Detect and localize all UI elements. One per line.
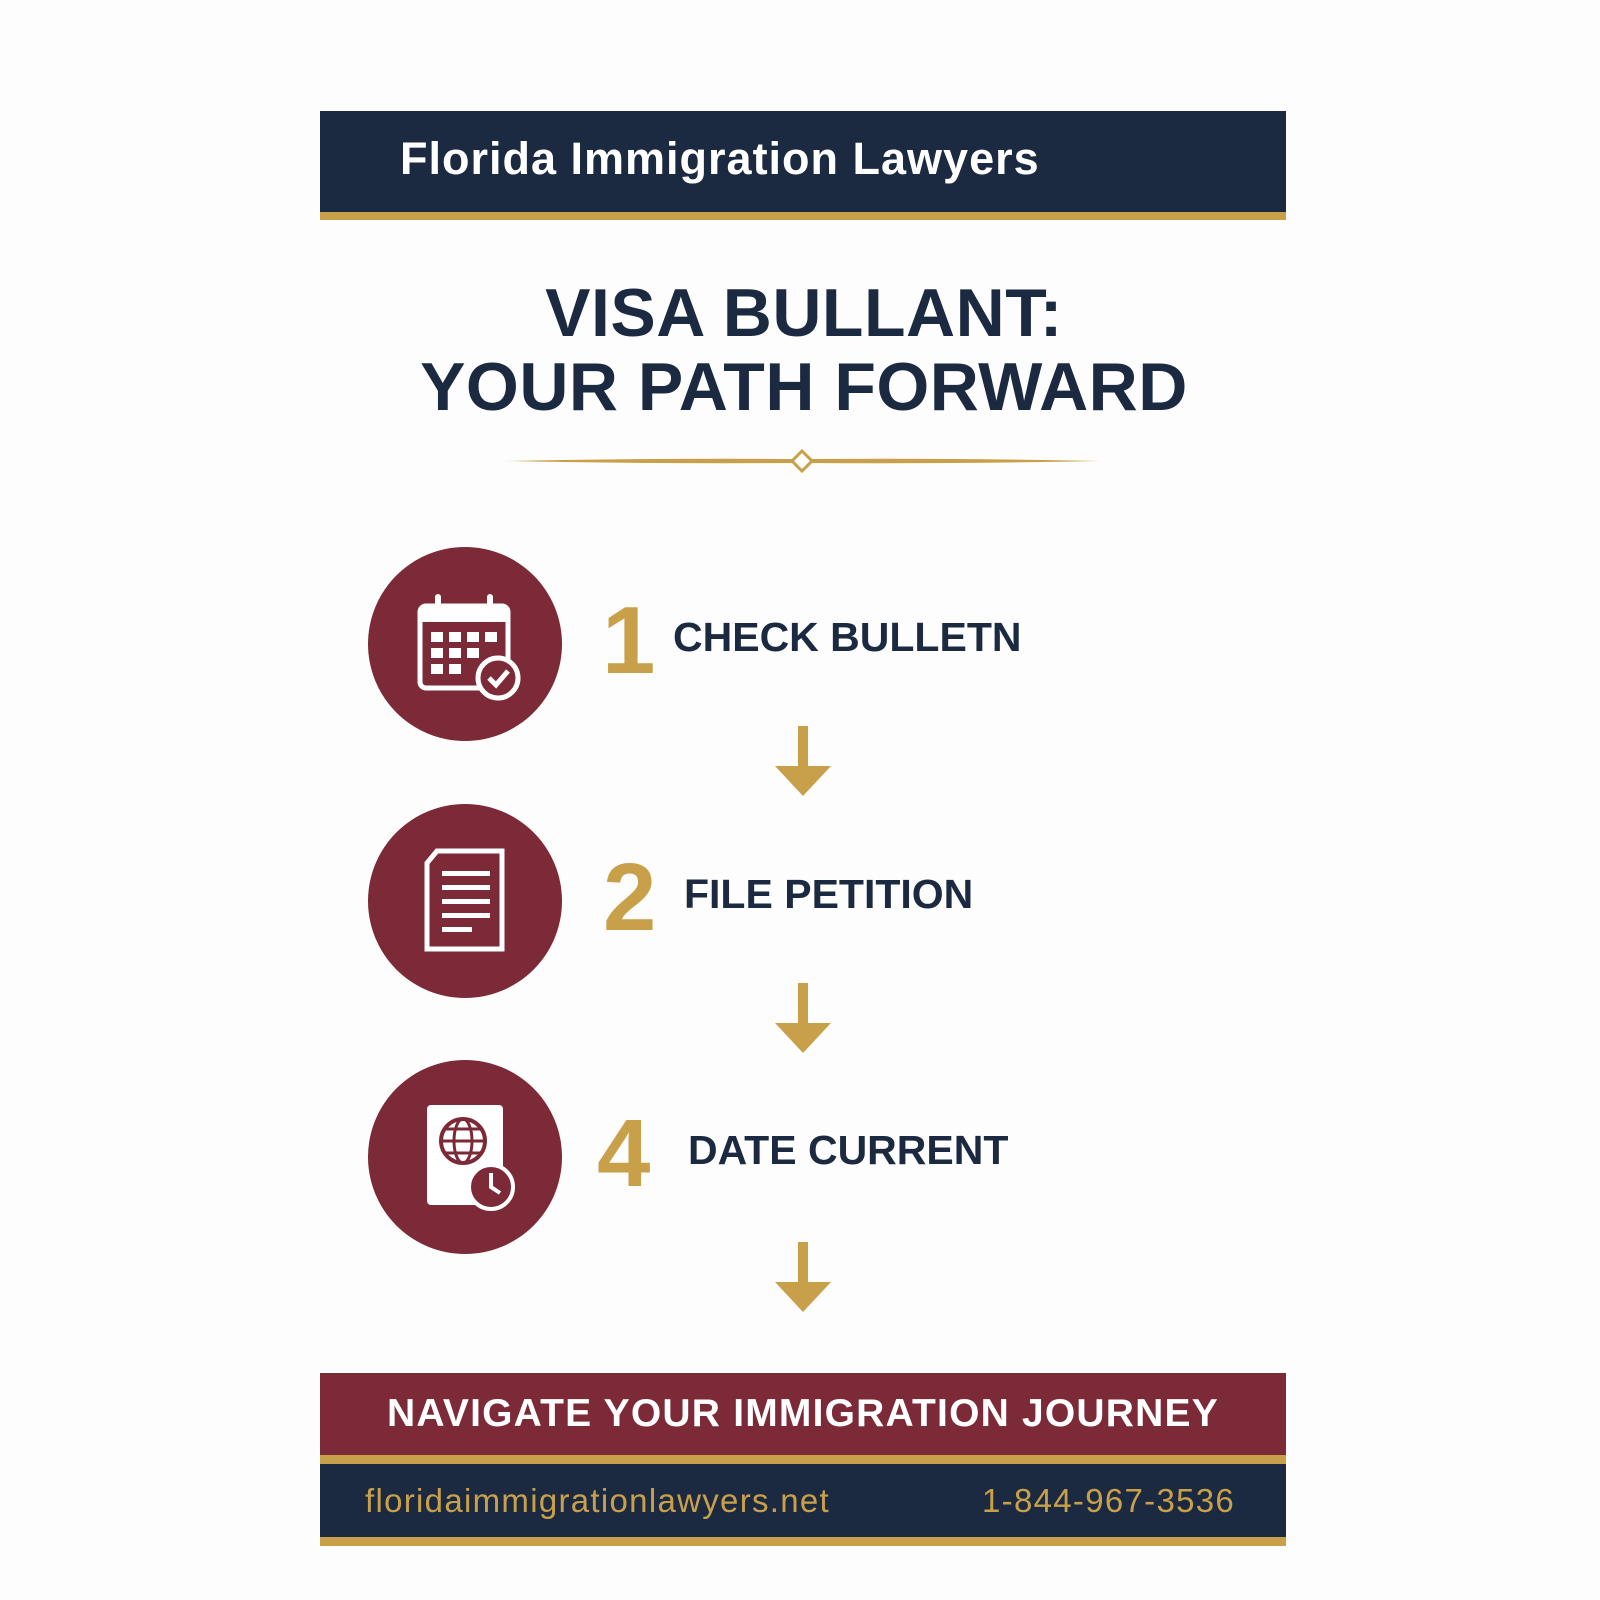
icon: document bbox=[368, 804, 562, 998]
label: FILE PETITION bbox=[684, 871, 973, 917]
title: YOUR PATH FORWARD bbox=[420, 349, 1188, 425]
label: CHECK BULLETN bbox=[673, 614, 1021, 660]
header bar bbox=[320, 111, 1286, 220]
phone: 1-844-967-3536 bbox=[982, 1482, 1235, 1519]
number 1: 1 bbox=[602, 587, 655, 694]
step 3 bbox=[368, 1060, 1008, 1254]
header text: Florida Immigration Lawyers bbox=[400, 133, 1040, 184]
call to action bbox=[320, 1373, 1286, 1455]
icon: passport with clock bbox=[368, 1060, 562, 1254]
number 4: 4 bbox=[597, 1100, 650, 1207]
website: floridaimmigrationlawyers.net bbox=[365, 1482, 830, 1519]
arrow 2 bbox=[775, 983, 831, 1053]
step 1 bbox=[368, 547, 1021, 741]
title: VISA BULLANT: bbox=[545, 275, 1063, 351]
call to action: NAVIGATE YOUR IMMIGRATION JOURNEY bbox=[387, 1392, 1219, 1435]
arrow 3 bbox=[775, 1242, 831, 1312]
footer banner bbox=[320, 1373, 1286, 1546]
divider ornament bbox=[506, 449, 1098, 473]
icon: calendar bbox=[368, 547, 562, 741]
arrow 1 bbox=[775, 726, 831, 796]
label: DATE CURRENT bbox=[688, 1127, 1008, 1173]
contact bar bbox=[320, 1464, 1286, 1537]
step 2 bbox=[368, 804, 973, 998]
title bbox=[420, 275, 1188, 425]
number 2: 2 bbox=[603, 844, 656, 951]
